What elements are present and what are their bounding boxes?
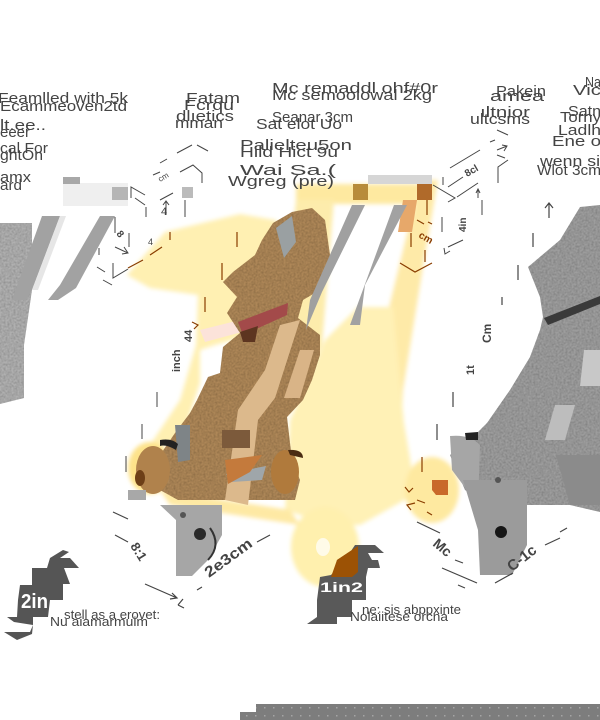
- far right text block: Wlot 3cm: [537, 162, 600, 179]
- bottom dimension lines left: [113, 512, 270, 608]
- grey toy walker left: [0, 177, 128, 404]
- dimension lines: right box: 4in: [458, 218, 469, 232]
- brown toy wheels: [136, 446, 170, 494]
- top left text block: [0, 90, 129, 194]
- dimension lines: left box: 8: [114, 229, 126, 241]
- top centre text block: Seanar 3cm: [272, 109, 353, 126]
- top centre text block: Sat elot Uo: [256, 116, 342, 133]
- far right text block: [537, 74, 600, 179]
- bottom band: [240, 704, 600, 720]
- bottom left caption: stell as a erovet:: [64, 607, 160, 622]
- vertical dimension right: Cm: [480, 324, 494, 343]
- top centre text block: [228, 80, 438, 190]
- top left text block: Ecammeoven2td: [0, 98, 127, 115]
- top centre text block: Mc semoolowal 2kg: [272, 87, 432, 104]
- top left text block: lt.ee..: [0, 117, 46, 134]
- bottom dimension lines left: 8:1: [127, 540, 150, 564]
- far right text block: Vic: [573, 82, 600, 99]
- brown handle joint: [353, 184, 368, 200]
- far right text block: Satn: [568, 103, 600, 120]
- vertical dimension left: [126, 329, 195, 472]
- top centre text block: Palielteu5on: [240, 137, 352, 154]
- bottom dimension lines right: [417, 522, 567, 588]
- top centre text block: Hild Hict 9u: [240, 144, 338, 161]
- grey walker lower wheels: [160, 505, 222, 576]
- top left text block: cal For: [0, 140, 48, 157]
- bottom left caption: Nu aiamarmuim: [50, 614, 148, 629]
- top left text block: eeer: [0, 124, 30, 141]
- top centre-left text block: [175, 90, 240, 132]
- top right text block: ultcsms: [470, 111, 530, 128]
- dimension lines: right box: [433, 130, 508, 254]
- bottom dimension lines right: Mc: [430, 535, 455, 560]
- top left text block: Feamlled with 5k: [0, 90, 129, 107]
- bottom right caption: [350, 602, 461, 624]
- right badge: [307, 545, 384, 624]
- far right text block: Ene o: [552, 133, 600, 150]
- far right text block: wenn si: [539, 153, 600, 170]
- dimension lines: left box: 4: [148, 237, 153, 247]
- right badge: 1in2: [320, 579, 363, 595]
- top right text block: [470, 83, 546, 128]
- top left text block: amx: [0, 169, 32, 186]
- dimension lines: left box: [97, 145, 208, 285]
- top centre-left text block: Fcrqu: [184, 97, 234, 114]
- top left text block: ard: [0, 177, 22, 194]
- brown dimension lines over yellow: cm: [416, 230, 435, 247]
- dimension lines: left box: 4: [161, 206, 167, 218]
- top centre text block: Wgreg (pre): [228, 173, 334, 190]
- bottom left caption: [50, 607, 160, 629]
- top centre text block: Mc remaddl ohf#0r: [272, 80, 438, 97]
- far right text block: Torny: [560, 109, 600, 126]
- left badge: 2 in 1: [4, 550, 79, 640]
- top centre-left text block: dlıetics: [176, 108, 234, 125]
- vertical dimension left: inch: [171, 349, 183, 372]
- light stripes: [225, 320, 300, 505]
- brown dimension lines over yellow: [128, 200, 435, 515]
- top right text block: amea: [490, 88, 545, 105]
- dimension lines: left box: cm: [156, 170, 171, 184]
- top centre text block: Wai Sa.(: [240, 162, 336, 179]
- top left text block: ghtOn: [0, 147, 43, 164]
- grey walker right and grey dog: [306, 175, 600, 575]
- brown plush dog: [128, 208, 330, 505]
- bottom dimension lines left: 2e3cm: [201, 535, 256, 581]
- top right text block: Pakein: [496, 83, 546, 100]
- vertical dimension right: 1t: [465, 365, 477, 375]
- dimension lines: right box: 8cl: [463, 163, 481, 180]
- left badge: 2 in 1: 2in: [21, 591, 48, 613]
- bottom right caption: ne: sis abppxinte: [362, 602, 461, 617]
- far right text block: Ladlh: [558, 122, 600, 139]
- top right text block: ıltnior: [480, 104, 530, 121]
- vertical dimension right: [437, 203, 553, 440]
- bottom right caption: Nolaiitese orcna: [350, 609, 449, 624]
- top centre-left text block: mman: [175, 115, 223, 132]
- bottom dimension lines right: C-1c: [504, 542, 540, 575]
- vertical dimension left: 44: [183, 329, 195, 342]
- yellow silhouette of toy and walker: [127, 180, 459, 592]
- top centre-left text block: Fatam: [186, 90, 240, 107]
